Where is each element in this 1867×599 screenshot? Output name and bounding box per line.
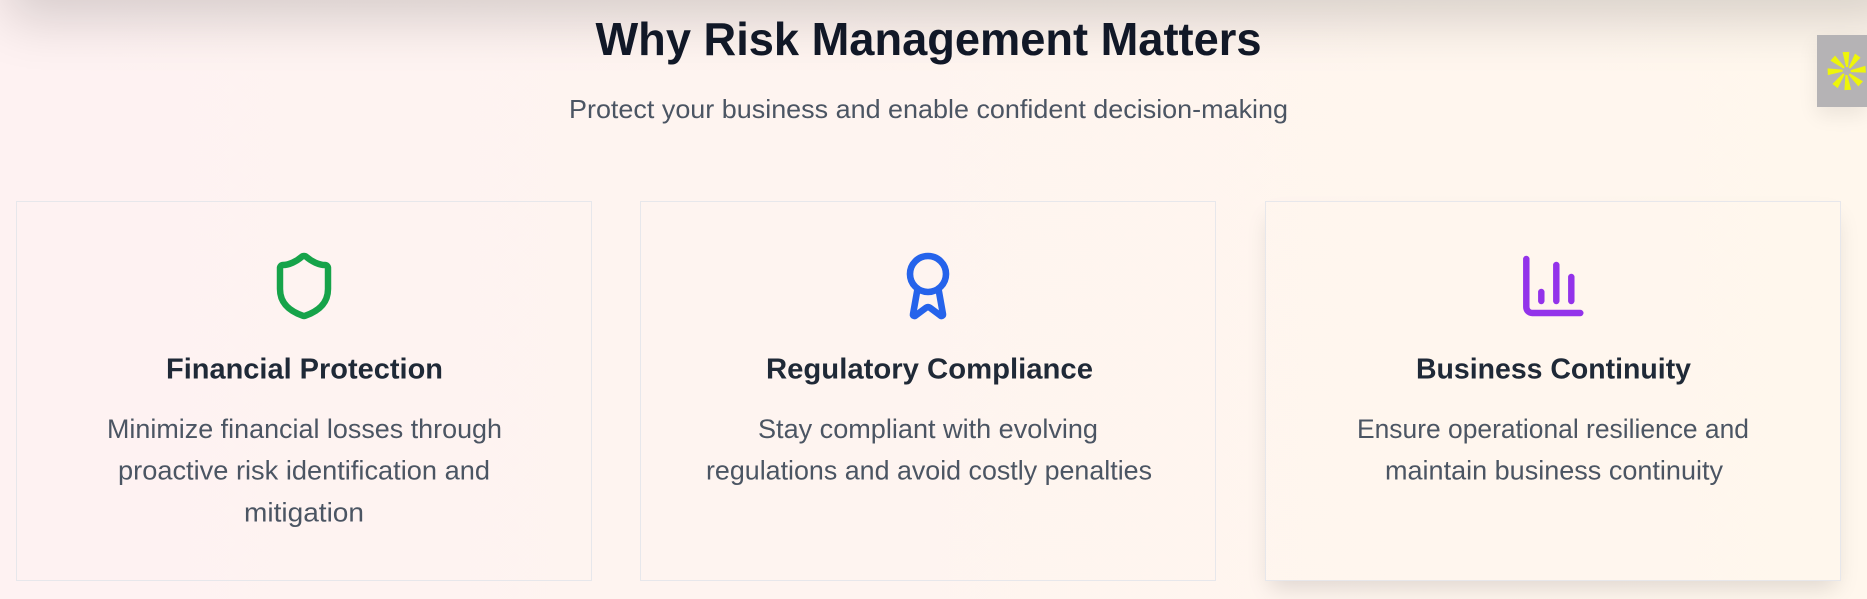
heading section xyxy=(569,13,1288,124)
card description: maintain business continuity xyxy=(1385,456,1724,486)
panel: business continuity xyxy=(1265,201,1841,581)
subtitle: Protect your business and enable confident decision-making xyxy=(569,94,1288,124)
card heading: Financial Protection xyxy=(166,354,443,386)
icon: yellow asterisk xyxy=(1828,52,1866,90)
title: Why Risk Management Matters xyxy=(596,13,1262,65)
card description: Minimize financial losses through xyxy=(107,414,502,444)
card description xyxy=(107,414,502,528)
card heading: Regulatory Compliance xyxy=(766,354,1093,386)
card description: regulations and avoid costly penalties xyxy=(706,456,1152,486)
icon: award ribbon xyxy=(910,256,946,316)
card heading: Business Continuity xyxy=(1416,354,1691,386)
panel: financial protection xyxy=(16,201,592,581)
icon: bar chart xyxy=(1526,259,1580,313)
card description xyxy=(1357,414,1749,486)
floating widget button xyxy=(1817,35,1867,107)
card description: Ensure operational resilience and xyxy=(1357,414,1749,444)
panel: regulatory compliance xyxy=(640,201,1216,581)
card description: mitigation xyxy=(244,498,364,528)
card description: proactive risk identification and xyxy=(118,456,490,486)
card description: Stay compliant with evolving xyxy=(758,414,1098,444)
card description xyxy=(706,414,1152,486)
icon: shield xyxy=(280,256,328,316)
